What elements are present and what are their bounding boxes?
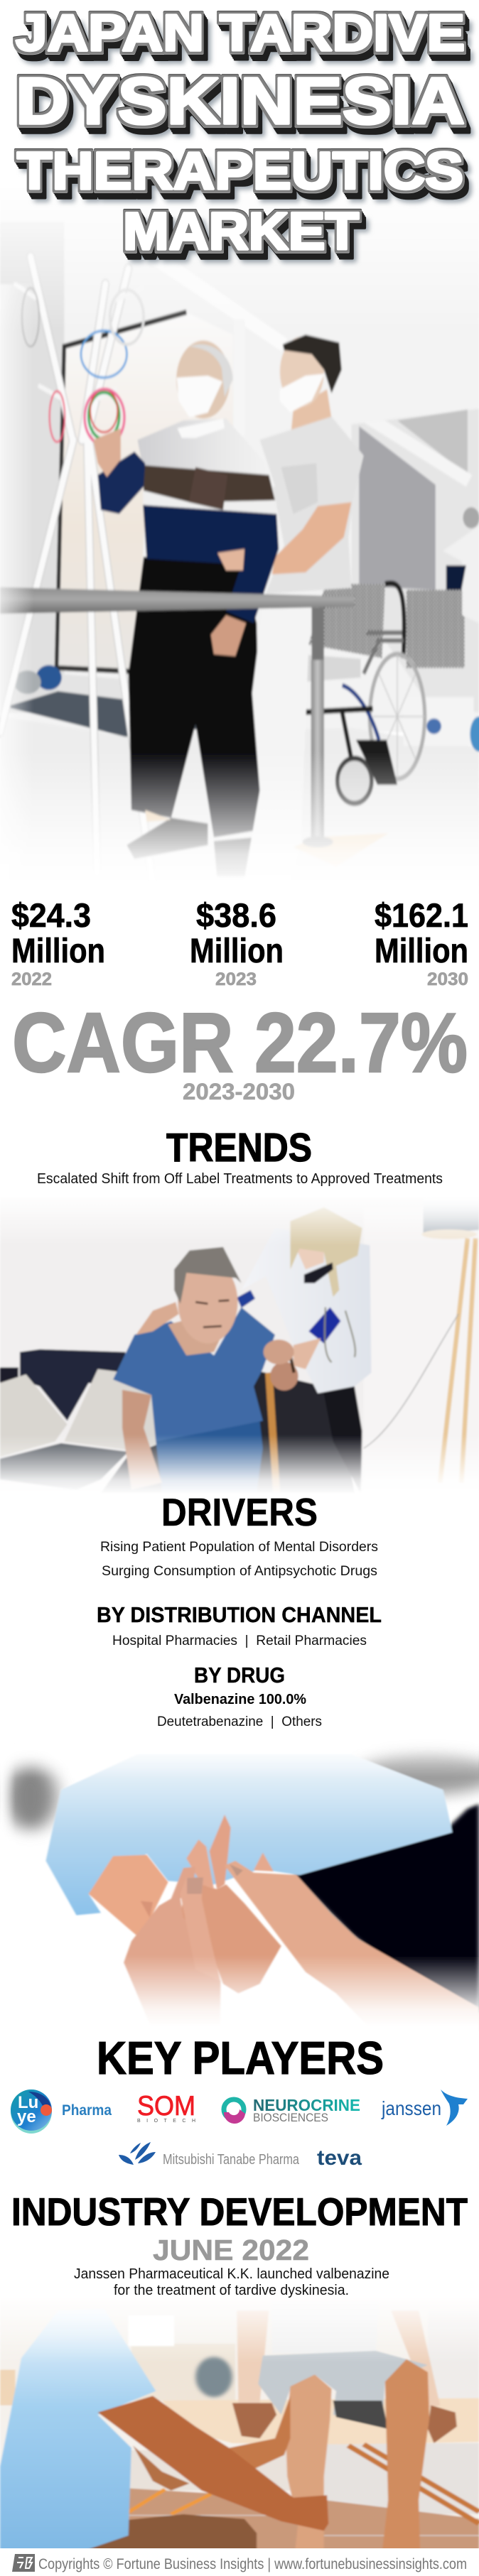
distribution channel text: Hospital Pharmacies | Retail Pharmacies xyxy=(112,1634,367,1648)
footer xyxy=(0,2548,479,2576)
wheelchair xyxy=(298,583,425,803)
photo: nurse helps man with cane rise from sofa xyxy=(0,1194,479,1507)
title: JAPAN TARDIVE xyxy=(16,5,465,62)
forearm xyxy=(89,1855,168,1939)
stat: 2022 market size xyxy=(11,896,105,989)
logo: Luye Pharma: Lu xyxy=(18,2093,38,2112)
sofa and cushions xyxy=(0,1349,355,1493)
logo: Luye Pharma: ye xyxy=(17,2107,36,2126)
rehabilitation ring stand xyxy=(0,257,154,895)
logo: Luye Pharma: Pharma xyxy=(62,2102,112,2119)
CAGR period: 2023-2030 xyxy=(183,1079,295,1104)
title xyxy=(16,5,465,261)
plant xyxy=(195,2357,232,2397)
patient xyxy=(232,2301,457,2553)
development text xyxy=(74,2266,389,2298)
logo: Mitsubishi Tanabe Pharma: Mitsubishi Tanabe Pharma xyxy=(163,2152,300,2168)
stat: 2023 market size xyxy=(190,896,284,989)
stat: 2023 market size: 2023 xyxy=(215,969,257,989)
title: DYSKINESIA xyxy=(16,64,465,138)
stat: 2030 market size: $162.1 xyxy=(375,896,468,934)
seated man with cane xyxy=(113,1247,298,1493)
stat: 2030 market size xyxy=(375,896,468,989)
elderly man's trousers and shoes xyxy=(127,557,262,876)
logo: SOM Biotech: BIOTECH xyxy=(137,2119,195,2124)
photo: physiotherapist treats patient's leg xyxy=(0,2310,479,2548)
elderly man xyxy=(93,341,279,656)
logo: Neurocrine Biosciences: NEUROCRINE xyxy=(253,2096,360,2114)
massage table xyxy=(125,2398,479,2536)
drug share: Valbenazine 100.0% xyxy=(174,1692,306,1707)
parallel bar rail and post xyxy=(0,587,388,866)
development text: Janssen Pharmaceutical K.K. launched valbenazine xyxy=(74,2266,389,2282)
logo: Neurocrine Biosciences: BIOSCIENCES xyxy=(253,2111,328,2124)
other drugs: Deutetrabenazine | Others xyxy=(157,1714,322,1729)
logo: Mitsubishi Tanabe Pharma xyxy=(119,2142,300,2168)
title: THERAPEUTICS xyxy=(17,141,463,200)
stat: 2023 market size: $38.6 xyxy=(196,896,276,934)
heading: trends: TRENDS xyxy=(166,1125,312,1170)
logo: Teva: teva xyxy=(317,2146,362,2170)
blue shirt xyxy=(45,1754,452,1915)
stat: 2022 market size: $24.3 xyxy=(11,896,91,934)
photo: therapist helps elderly man at parallel bar xyxy=(0,183,479,925)
heading: by drug: BY DRUG xyxy=(194,1663,285,1688)
floor lamp xyxy=(364,1194,479,1483)
stat: 2030 market size: 2030 xyxy=(427,969,468,989)
logo: Janssen xyxy=(381,2089,468,2126)
photo: hand massage therapy xyxy=(0,1733,479,2035)
stat: 2022 market size: 2022 xyxy=(11,969,52,989)
title: MARKET xyxy=(123,202,359,261)
therapist xyxy=(242,335,364,895)
logo: SOM Biotech: SOM xyxy=(137,2091,195,2121)
physiotherapist xyxy=(0,2308,328,2553)
stat: 2023 market size: Million xyxy=(190,933,284,970)
nurse xyxy=(237,1207,371,1493)
blurred background xyxy=(4,1752,479,2012)
icon: Fortune Business Insights logo xyxy=(12,2554,35,2572)
logo: Neurocrine Biosciences xyxy=(224,2096,360,2124)
hands xyxy=(124,1815,479,2031)
development date: JUNE 2022 xyxy=(153,2234,309,2266)
mirror reflection xyxy=(404,507,479,751)
drivers text: Surging Consumption of Antipsychotic Drugs xyxy=(102,1564,377,1579)
logo: Janssen: janssen xyxy=(381,2097,441,2119)
trends text: Escalated Shift from Off Label Treatments to Approved Treatments xyxy=(37,1171,443,1187)
stat: 2022 market size: Million xyxy=(11,933,105,970)
development text: for the treatment of tardive dyskinesia. xyxy=(114,2283,349,2298)
heading: key players: KEY PLAYERS xyxy=(97,2032,384,2084)
heading: drivers: DRIVERS xyxy=(161,1490,318,1534)
logo: Luye Pharma xyxy=(11,2089,112,2134)
drivers text xyxy=(100,1540,378,1579)
drivers text: Rising Patient Population of Mental Disorders xyxy=(100,1540,378,1555)
heading: by distribution channel: BY DISTRIBUTION CHANNEL xyxy=(97,1602,382,1627)
